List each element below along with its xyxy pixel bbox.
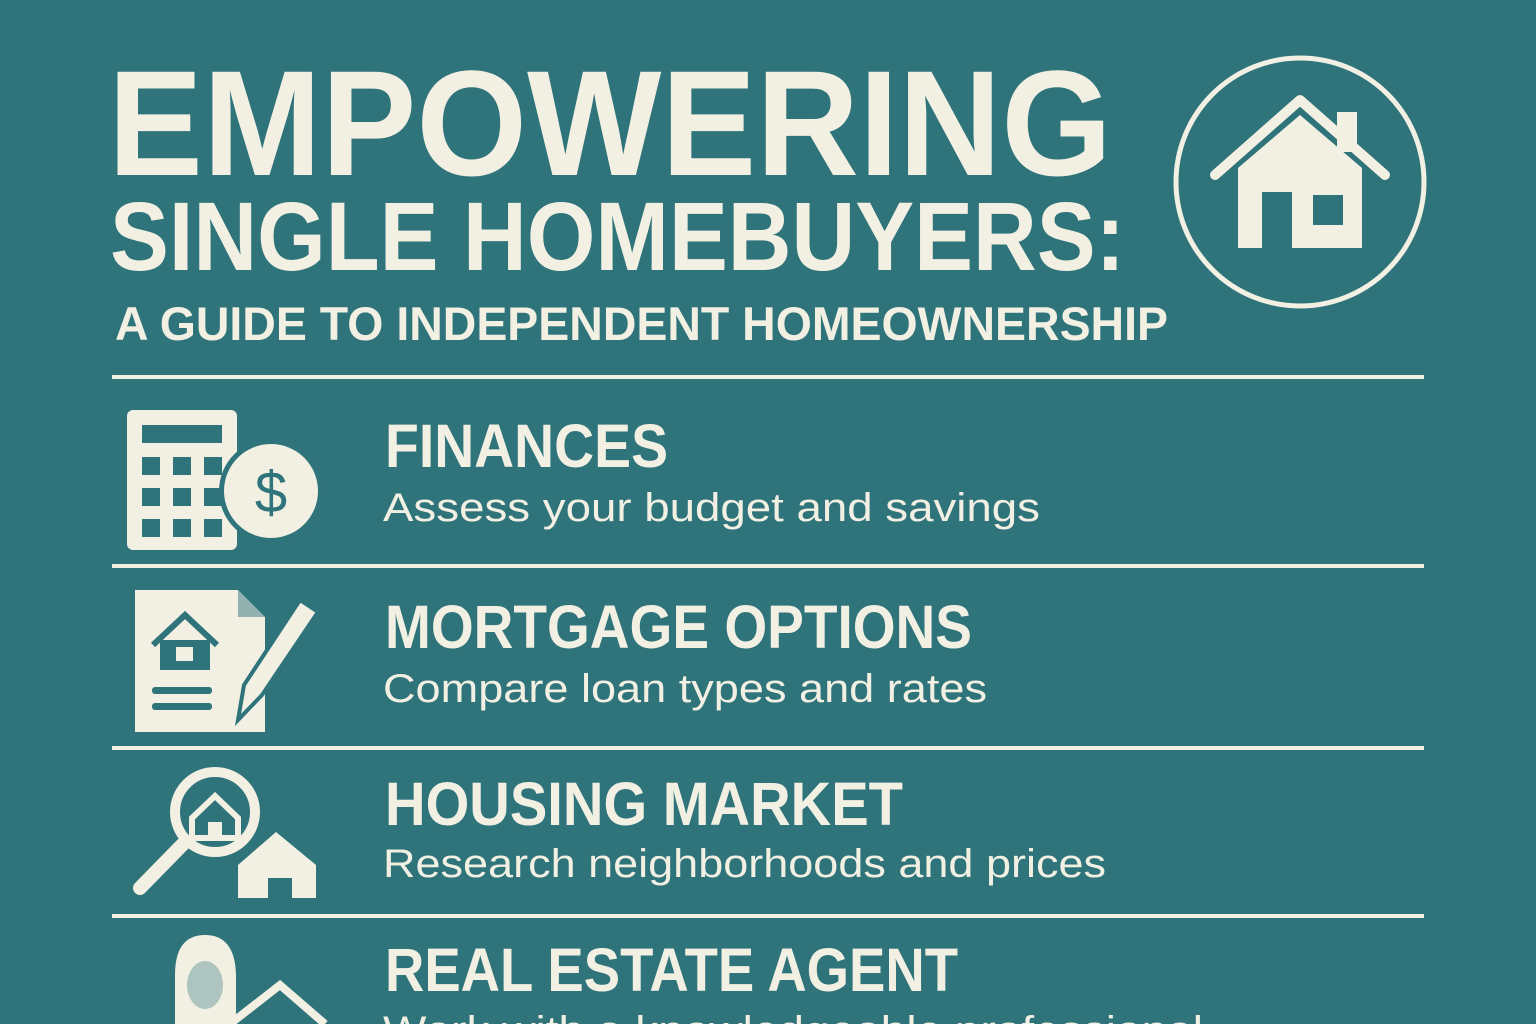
text: real estate agent xyxy=(383,936,1203,1024)
text: mortgage xyxy=(383,593,987,711)
icon: calculator with dollar xyxy=(127,410,323,550)
icon: house in circle xyxy=(1176,58,1424,306)
text: housing market xyxy=(383,770,1106,886)
tagline: A GUIDE TO INDEPENDENT HOMEOWNERSHIP xyxy=(115,297,1168,350)
title: EMPOWERING xyxy=(108,39,1112,207)
text: mortgage: Compare loan types and rates xyxy=(383,667,987,711)
icon: agent xyxy=(175,935,325,1024)
icon: calculator with dollar: $ xyxy=(255,460,287,525)
text: real estate agent: REAL ESTATE AGENT xyxy=(385,936,958,1004)
text: finances: Assess your budget and savings xyxy=(383,486,1040,530)
text: mortgage: MORTGAGE OPTIONS xyxy=(385,593,972,661)
title xyxy=(108,39,1125,291)
text: housing market: HOUSING MARKET xyxy=(385,770,903,838)
icon: magnifier and house xyxy=(140,772,316,898)
icon: mortgage document with pen xyxy=(135,590,318,732)
text: finances: FINANCES xyxy=(385,412,668,480)
text: finances xyxy=(383,412,1040,530)
text: housing market: Research neighborhoods and prices xyxy=(383,842,1106,886)
subtitle line: SINGLE HOMEBUYERS: xyxy=(110,182,1125,291)
